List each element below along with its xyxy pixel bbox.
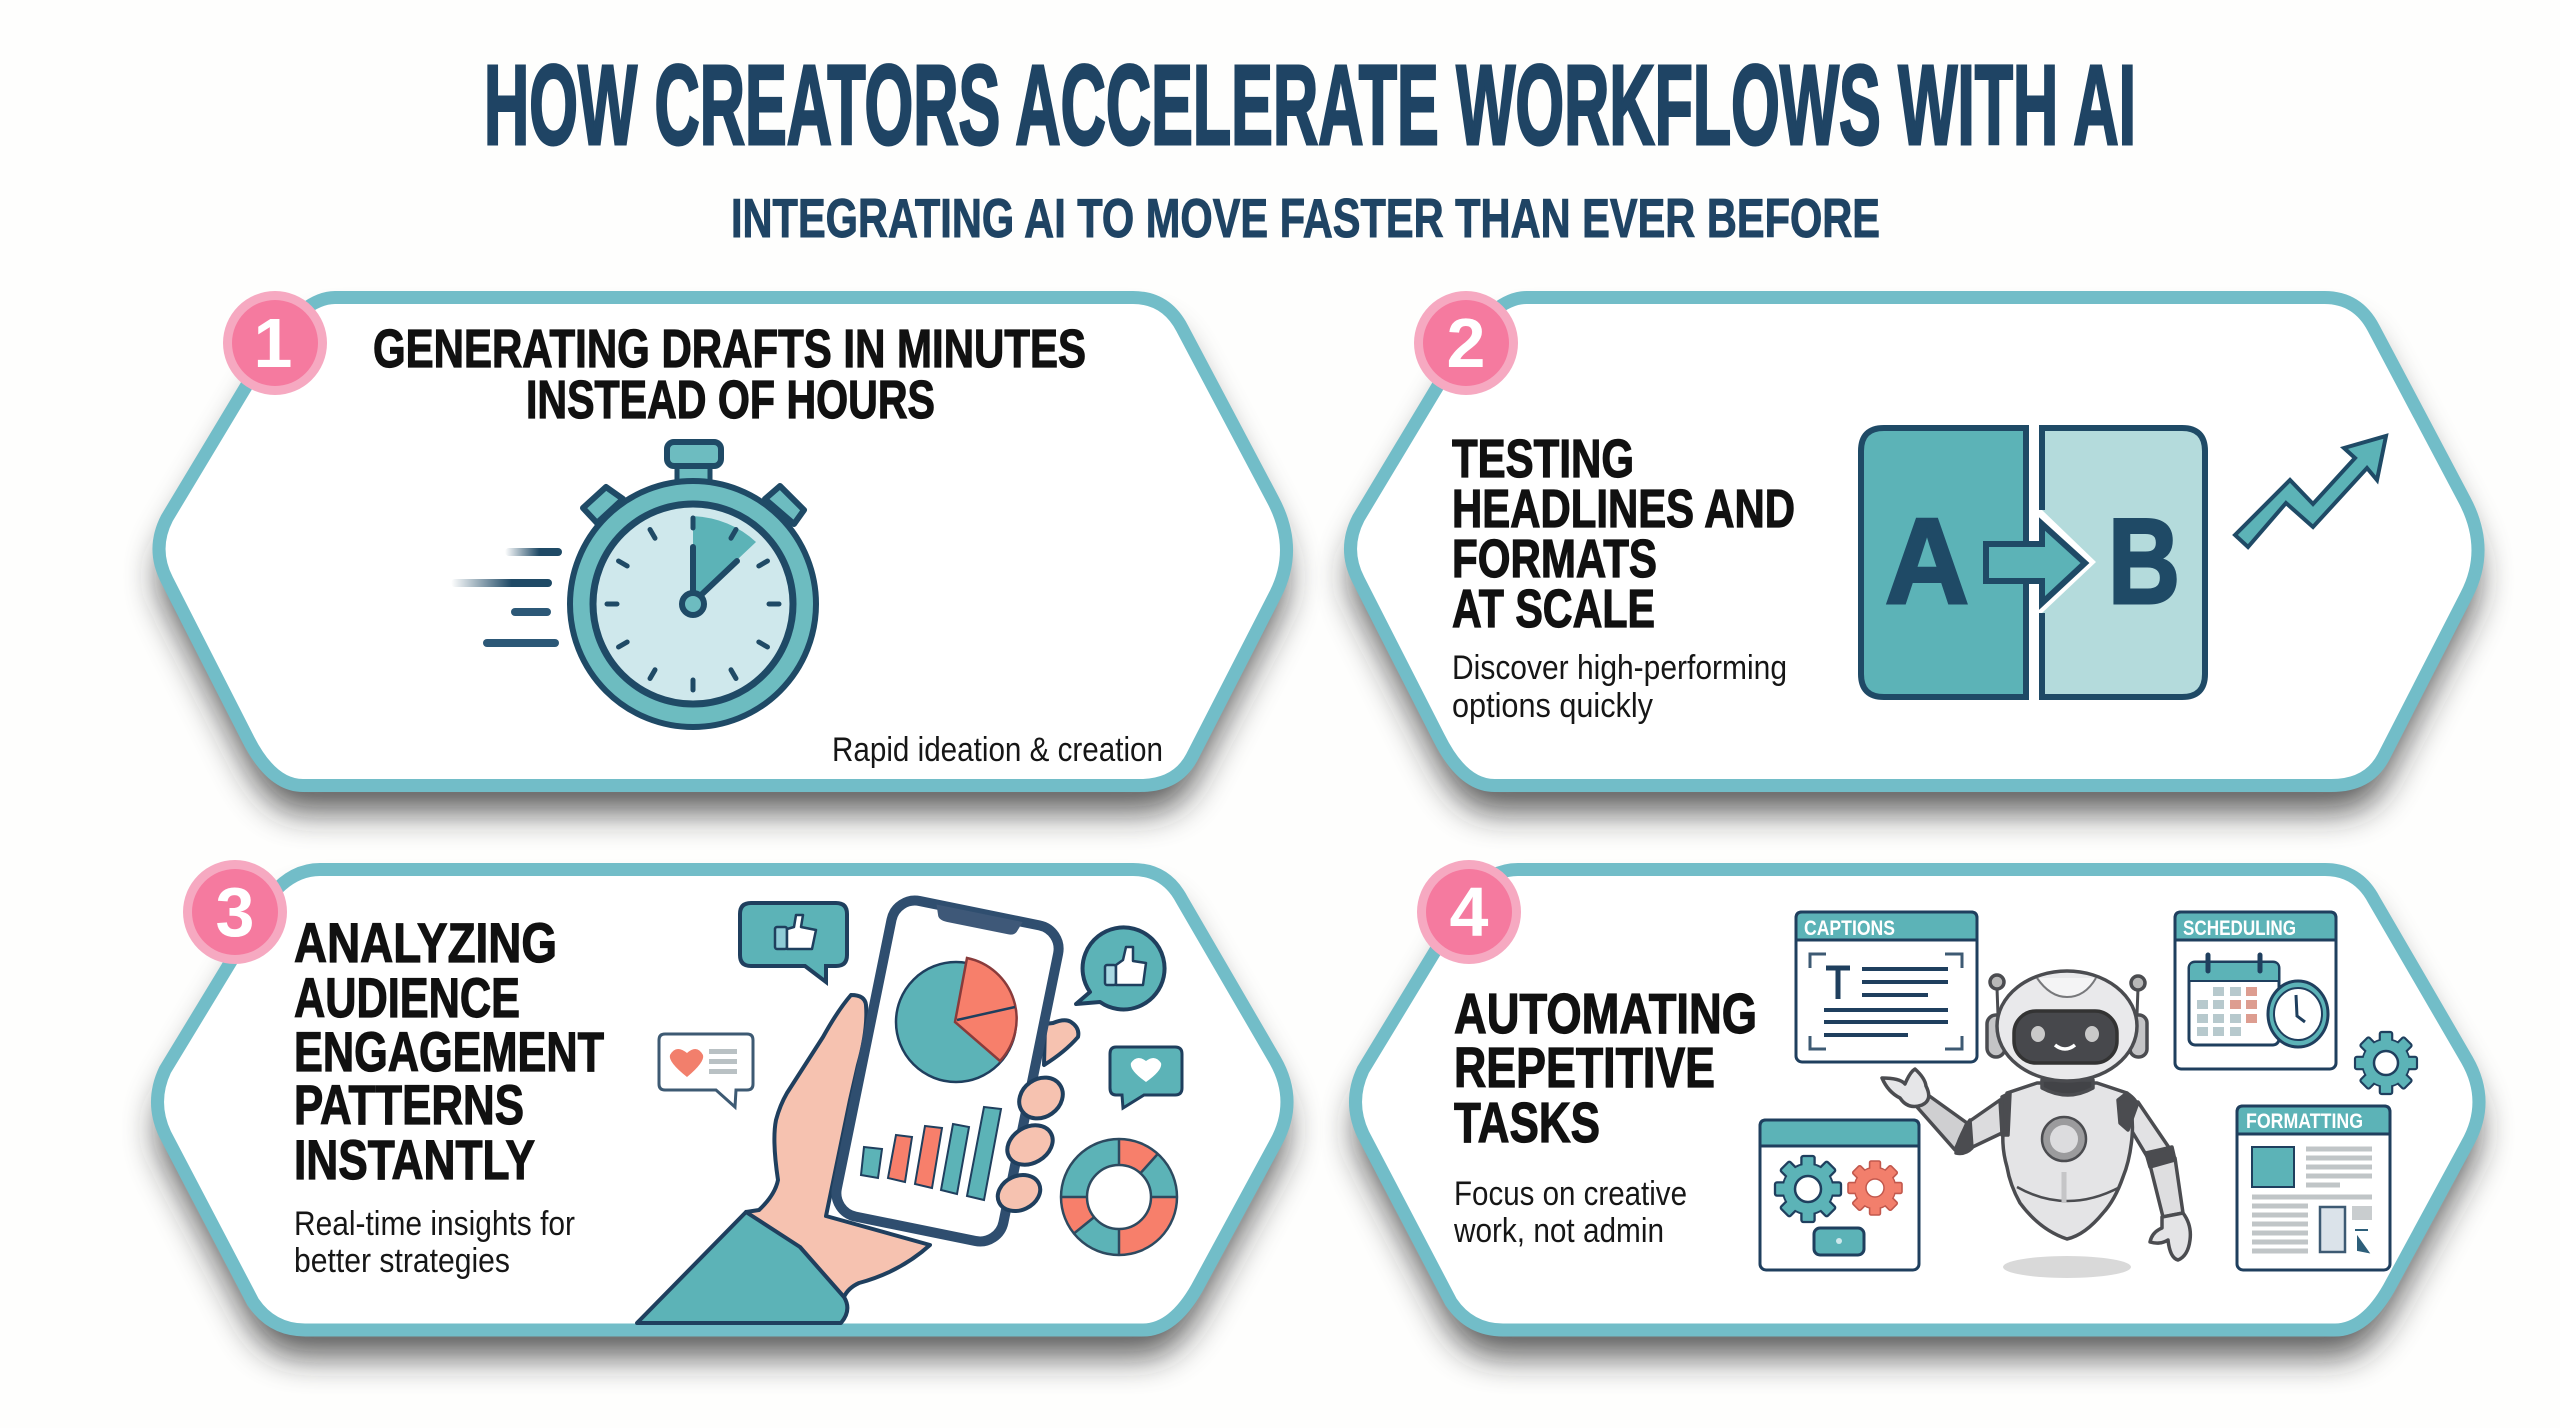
panel 2: testing headlines [1350, 291, 2478, 812]
panel 4 caption [1453, 1175, 1687, 1250]
panel 4: automating tasks [1356, 860, 2479, 1357]
badge 2: 2 [1447, 304, 1485, 382]
panel 2 heading: FORMATS [1452, 529, 1657, 589]
badge 4: 4 [1450, 873, 1489, 951]
scheduling window: SCHEDULING [2183, 917, 2296, 940]
panel 3 caption: Real-time insights for [294, 1205, 575, 1243]
icon: heart bubble [1110, 1047, 1182, 1108]
panel 3 heading: INSTANTLY [294, 1128, 535, 1191]
panel 2 caption: options quickly [1452, 687, 1653, 725]
panel 4 heading: AUTOMATING [1454, 982, 1757, 1046]
pie chart [896, 958, 1017, 1082]
panel 1 caption: Rapid ideation & creation [832, 731, 1163, 769]
panel 1 heading [373, 319, 1086, 430]
panel 1 heading: GENERATING DRAFTS IN MINUTES [373, 319, 1086, 379]
neck [2042, 1080, 2093, 1095]
panel 4 frame [1356, 870, 2479, 1330]
captions window: CAPTIONS [1804, 917, 1895, 940]
robot shadow [2003, 1256, 2131, 1278]
formatting window: FORMATTING [2246, 1110, 2363, 1133]
icon: round thumbs-up bubble [1076, 927, 1165, 1009]
panel 1 heading: INSTEAD OF HOURS [526, 370, 935, 430]
icon: donut chart [1061, 1139, 1177, 1255]
panel 4 caption: work, not admin [1453, 1212, 1664, 1250]
panel 3 frame [158, 870, 1287, 1330]
icon: robot [1882, 971, 2190, 1260]
speed lines [451, 548, 562, 647]
panel 1: generating drafts [159, 291, 1287, 812]
ears [1987, 1015, 2005, 1057]
settings window [1760, 1120, 1919, 1270]
icon: A/B test card: A [1885, 493, 1969, 629]
panel 4 heading: REPETITIVE [1454, 1036, 1715, 1100]
panel 3 heading: AUDIENCE [294, 966, 520, 1029]
icon: thumbs-up bubble [740, 903, 847, 982]
panel 3 caption: better strategies [294, 1242, 510, 1280]
panel 1 frame [159, 298, 1287, 786]
panel 3 heading: ANALYZING [294, 911, 557, 974]
icon: growth arrow [2235, 436, 2386, 547]
panel 3 heading: PATTERNS [294, 1073, 524, 1136]
panel 4 heading: TASKS [1454, 1091, 1600, 1155]
panel 3 heading: ENGAGEMENT [294, 1020, 604, 1083]
head [1997, 971, 2137, 1081]
panel 3 heading [294, 911, 604, 1191]
panel 2 heading: HEADLINES AND [1452, 479, 1795, 539]
panel 3 caption [294, 1205, 575, 1280]
panel 2 heading [1452, 429, 1795, 639]
left arm [1882, 1069, 2002, 1153]
badge 4 [1417, 860, 1521, 964]
badge 1 [223, 291, 327, 395]
subtitle: INTEGRATING AI TO MOVE FASTER THAN EVER BEFORE [731, 187, 1880, 249]
panel 2 caption: Discover high-performing [1452, 649, 1787, 687]
panel 2 heading: AT SCALE [1452, 579, 1655, 639]
icon: stopwatch [570, 442, 816, 727]
panel 2 caption [1452, 649, 1787, 725]
panel 3: analyzing engagement [158, 860, 1287, 1357]
icon: A/B test card [1861, 428, 2205, 697]
captions window [1796, 912, 1977, 1062]
torso [2003, 1083, 2132, 1239]
badge 3: 3 [216, 873, 254, 951]
panel 1 shadow [159, 324, 1287, 812]
icon: gear [2355, 1032, 2417, 1094]
badge 1: 1 [254, 304, 292, 382]
formatting window [2237, 1106, 2390, 1270]
icon: heart note bubble [659, 1034, 753, 1107]
badge 2 [1414, 291, 1518, 395]
scheduling window [2175, 912, 2336, 1069]
panel 4 heading [1454, 982, 1757, 1155]
right arm [2127, 1102, 2190, 1260]
panel 4 caption: Focus on creative [1454, 1175, 1687, 1213]
panel 2 shadow [1350, 324, 2478, 812]
panel 3 shadow [158, 896, 1287, 1357]
icon: A/B test card: B [2108, 493, 2180, 629]
panel 4 shadow [1356, 896, 2479, 1357]
panel 2 frame [1350, 298, 2478, 786]
badge 3 [183, 860, 287, 964]
panel 2 heading: TESTING [1452, 429, 1634, 489]
icon: hand holding phone [637, 896, 1078, 1323]
bar chart [861, 1107, 1001, 1200]
